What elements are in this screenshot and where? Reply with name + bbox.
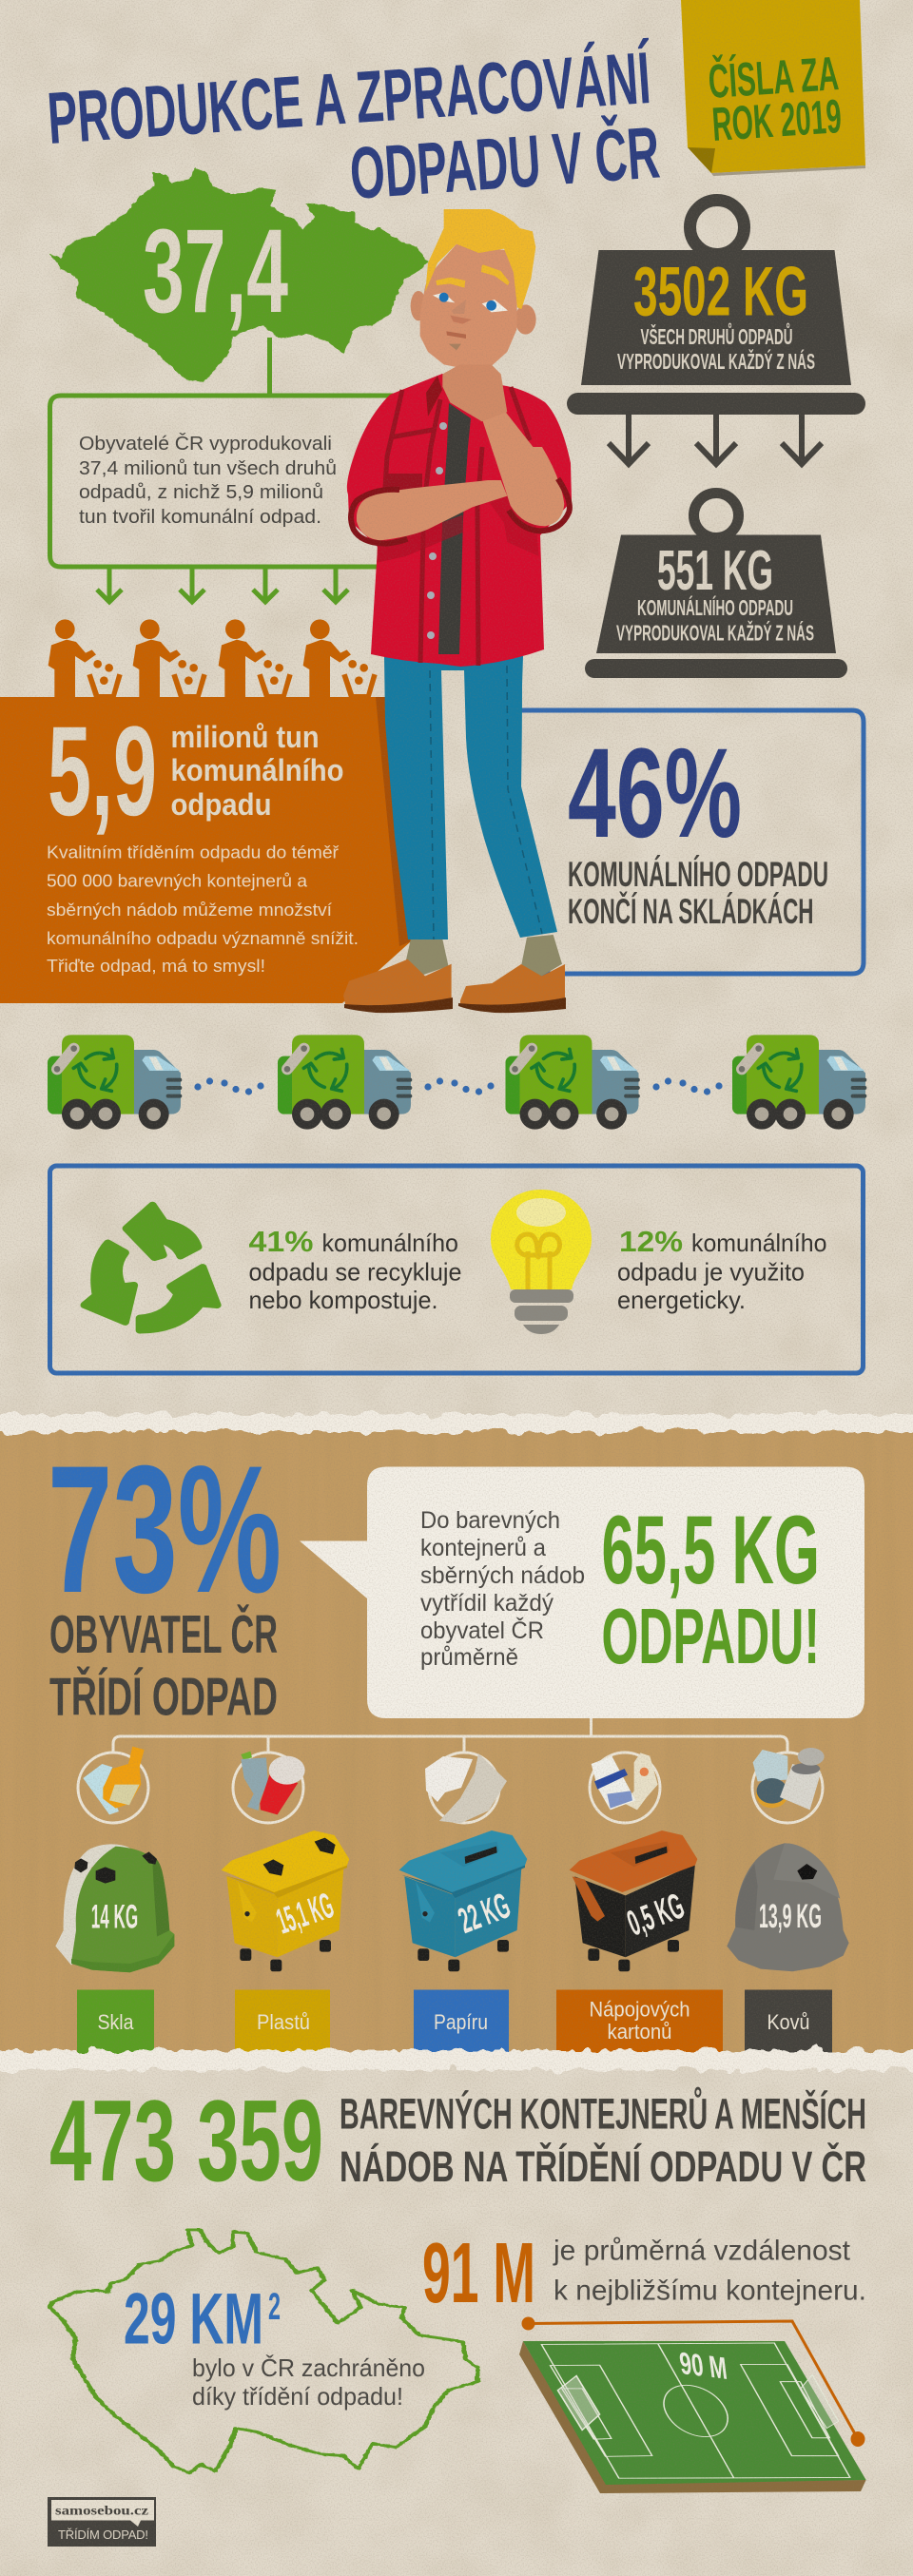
speech bubble: 65,5 kg: průměrně [420, 1644, 518, 1671]
weight: 3502 kg: VŠECH DRUHŮ ODPADŮ [641, 321, 793, 349]
bin: plastic [222, 1830, 349, 1971]
bin: glass: 14 KG [91, 1898, 138, 1936]
panel: total waste text box: tun tvořil komunální odpad. [79, 506, 321, 528]
icon: carton items [592, 1753, 658, 1810]
panel: 5,9 milionů tun orange: milionů tun [171, 720, 320, 754]
category labels: kartonů [607, 2020, 671, 2043]
panel: 46% landfill [504, 710, 864, 974]
title [45, 36, 662, 215]
icon: recycling arrows [85, 1205, 217, 1330]
headline: 73% [48, 1428, 282, 1727]
headline: 73%: OBYVATEL ČR [49, 1603, 278, 1665]
category labels: Kovů [767, 2010, 810, 2034]
panel: 5,9 milionů tun orange: sběrných nádob můžeme množství [47, 900, 333, 920]
weight: 551 kg [585, 493, 847, 678]
panel: 5,9 milionů tun orange: 5,9 [48, 701, 157, 843]
leader line: pitch length [521, 2316, 865, 2447]
map: 37,4 green Czech Republic [49, 168, 428, 382]
panel: recycling and energy: odpadu je využito [617, 1257, 805, 1286]
icons: garbage trucks [48, 1035, 865, 1130]
speech bubble: 65,5 kg: kontejnerů a [420, 1535, 546, 1561]
weight: 3502 kg: 3502 KG [633, 253, 808, 331]
stat: 91 m: 91 M [422, 2226, 535, 2321]
panel: 5,9 milionů tun orange: odpadu [171, 787, 272, 822]
panel: recycling and energy: 41% [249, 1225, 314, 1258]
panel: total waste text box: Obyvatelé ČR vyprodukovali [79, 433, 332, 455]
torn paper edges [0, 1414, 913, 2070]
football pitch: 90 M [677, 2346, 728, 2386]
bin: metal [727, 1843, 849, 1971]
logo: samosebou.cz: samosebou.cz [55, 2505, 148, 2518]
panel: 5,9 milionů tun orange: 500 000 barevných kontejnerů a [47, 871, 308, 890]
bin: paper [399, 1830, 527, 1971]
bin: paper: 22 KG [454, 1886, 515, 1942]
panel: recycling and energy: 12% [619, 1225, 683, 1258]
category labels: Skla [97, 2010, 134, 2034]
arrows: green down [97, 567, 348, 602]
speech bubble: 65,5 kg: vytřídil každý [420, 1590, 554, 1617]
arrows: grey down [609, 415, 822, 464]
category labels [77, 1989, 832, 2058]
bin: metal: 13,9 KG [759, 1898, 822, 1935]
speech bubble: 65,5 kg: sběrných nádob [420, 1562, 585, 1589]
weight: 551 kg: 551 KG [657, 539, 773, 602]
headline: 73%: 73% [48, 1428, 282, 1631]
panel: recycling and energy: odpadu se recykluje [249, 1257, 462, 1286]
icon: plastic items [241, 1752, 305, 1814]
panel: 5,9 milionů tun orange: komunálního odpadu významně snížit. [47, 928, 359, 948]
headline: 473 359 containers: 473 359 [49, 2076, 323, 2205]
category labels: Plastů [257, 2010, 310, 2034]
panel: 46% landfill: 46% [568, 723, 742, 864]
map outline: 29 km2: 2 [268, 2286, 281, 2328]
panel: total waste text box: odpadů, z nichž 5,9 milionů [79, 481, 323, 503]
map outline: 29 km2: díky třídění odpadu! [192, 2382, 403, 2411]
headline: 73%: TŘÍDÍ ODPAD [49, 1666, 278, 1727]
icon: light bulb [491, 1190, 592, 1334]
map outline: 29 km2: bylo v ČR zachráněno [192, 2353, 425, 2382]
panel: total waste text box [49, 338, 399, 567]
panel: total waste text box: 37,4 milionů tun všech druhů [79, 457, 337, 479]
category labels: Nápojových [590, 1997, 690, 2022]
sticker: čísla za rok 2019 [681, 0, 865, 176]
football pitch [519, 2341, 866, 2493]
panel: recycling and energy: komunálního [691, 1229, 827, 1257]
panel: 5,9 milionů tun orange: Kvalitním tříděním odpadu do téměř [47, 843, 340, 862]
stat: 91 m: je průměrná vzdálenost [553, 2235, 851, 2267]
panel: recycling and energy: nebo kompostuje. [249, 1286, 437, 1314]
panel: 5,9 milionů tun orange: komunálního [171, 753, 344, 787]
man thinking [343, 209, 572, 1013]
bin: beverage cartons: 0,5 KG [622, 1887, 690, 1944]
headline: 473 359 containers [49, 2076, 866, 2205]
panel: recycling and energy: energeticky. [617, 1286, 746, 1314]
category labels: Papíru [434, 2010, 488, 2034]
icon: paper items [425, 1753, 507, 1824]
map outline: 29 km2: 29 KM [124, 2278, 263, 2360]
bin: plastic: 15,1 KG [272, 1886, 339, 1943]
speech bubble: 65,5 kg: obyvatel ČR [420, 1617, 544, 1644]
panel: 5,9 milionů tun orange [0, 697, 411, 1003]
panel: 5,9 milionů tun orange: Třiďte odpad, má to smysl! [47, 956, 265, 976]
icons: people sorting waste [49, 619, 378, 701]
stat: 91 m [422, 2226, 866, 2321]
cardboard section background [0, 1426, 913, 2056]
connector tree and item circles [78, 1718, 823, 1823]
speech bubble: 65,5 kg [300, 1466, 864, 1718]
weight: 551 kg: KOMUNÁLNÍHO ODPADU [637, 594, 793, 620]
bin: glass [55, 1844, 174, 1972]
icon: metal items [753, 1748, 825, 1810]
weight: 3502 kg [567, 200, 865, 415]
logo: samosebou.cz [48, 2497, 156, 2547]
title: ODPADU V ČR [347, 110, 662, 215]
map outline: 29 km2 [49, 2230, 477, 2473]
bin: beverage cartons [570, 1830, 697, 1971]
logo: samosebou.cz: TŘÍDÍM ODPAD! [58, 2528, 148, 2542]
panel: recycling and energy [49, 1166, 864, 1373]
map: 37,4 green Czech Republic: 37,4 [143, 205, 288, 338]
icon: glass items [83, 1747, 145, 1814]
panel: recycling and energy: komunálního [321, 1229, 458, 1257]
speech bubble: 65,5 kg: Do barevných [420, 1507, 560, 1534]
stat: 91 m: k nejbližšímu kontejneru. [554, 2275, 866, 2307]
